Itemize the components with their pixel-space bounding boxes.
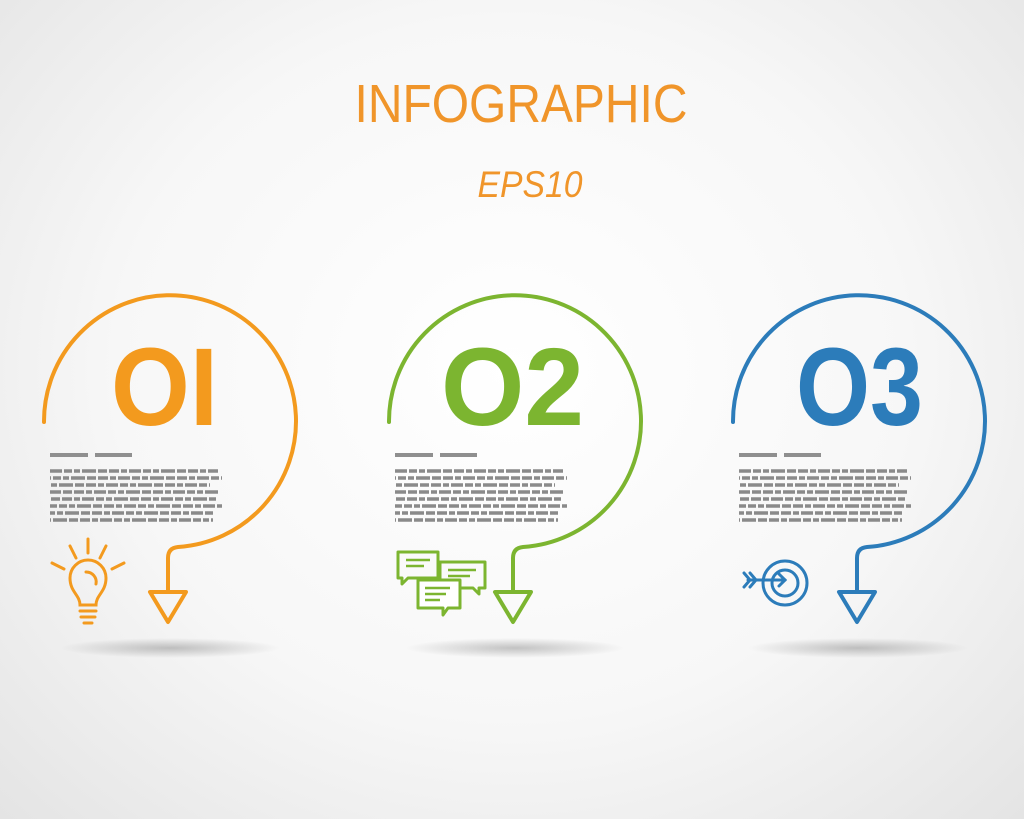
- text block 01: [50, 453, 222, 520]
- icon: target: [744, 561, 807, 605]
- text block 02: [395, 453, 567, 520]
- icon: chat bubbles: [398, 552, 485, 615]
- arrow outline 01: [44, 295, 296, 592]
- number 02: O2: [441, 326, 584, 449]
- text block 03: [739, 453, 911, 520]
- icon: light bulb: [52, 539, 124, 623]
- panel: step 01: [44, 295, 296, 658]
- panel: step 02: [389, 295, 641, 658]
- number 01: OI: [111, 326, 218, 449]
- arrow outline 03: [733, 295, 985, 592]
- panel: step 03: [733, 295, 985, 658]
- title: INFOGRAPHIC: [354, 74, 688, 134]
- subtitle: EPS10: [478, 164, 583, 205]
- arrow outline 02: [389, 295, 641, 592]
- number 03: O3: [796, 326, 923, 449]
